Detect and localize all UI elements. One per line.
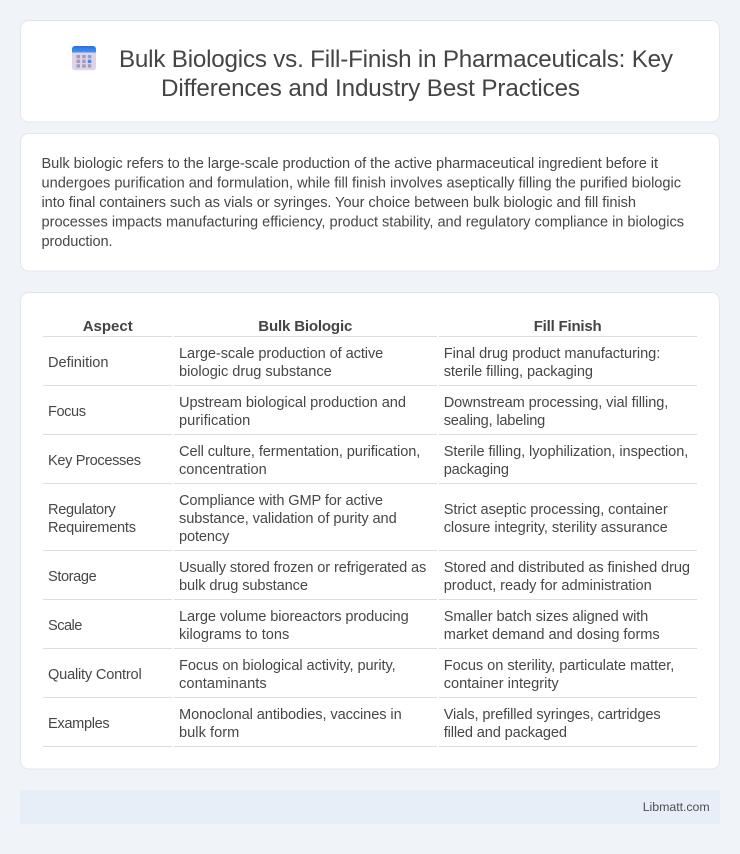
row: Definition: Large-scale production of active bbox=[179, 346, 383, 362]
row: Examples: Monoclonal antibodies, vaccines in bbox=[179, 707, 402, 723]
row: Examples: filled and packaged bbox=[444, 725, 567, 741]
row: Regulatory Requirements: Compliance with GMP for active bbox=[179, 493, 383, 509]
row: Focus: Downstream processing, vial filling, bbox=[444, 395, 668, 411]
row: Quality Control bbox=[43, 658, 697, 698]
row: Key Processes: Cell culture, fermentation, purification, bbox=[179, 444, 420, 460]
row: Examples: bulk form bbox=[179, 725, 239, 741]
row: Scale: Smaller batch sizes aligned with bbox=[444, 609, 648, 625]
row: Scale: kilograms to tons bbox=[179, 627, 289, 643]
row: Regulatory Requirements bbox=[43, 493, 697, 551]
row: Key Processes: Sterile filling, lyophilization, inspection, bbox=[444, 444, 688, 460]
footer bar: Libmatt.com bbox=[643, 800, 710, 814]
title: Differences and Industry Best Practices bbox=[161, 75, 580, 102]
row: Regulatory Requirements: closure integrity, sterility assurance bbox=[444, 520, 668, 536]
row: Definition: biologic drug substance bbox=[179, 364, 332, 380]
row: Key Processes: Key Processes bbox=[48, 453, 141, 469]
text block: summary paragraph: Bulk biologic refers to the large-scale production of the active pharmaceutical ingredient before it bbox=[42, 156, 658, 172]
row: Focus: purification bbox=[179, 413, 250, 429]
table header row: Bulk Biologic bbox=[258, 318, 352, 335]
row: Key Processes: packaging bbox=[444, 462, 509, 478]
row: Scale: Large volume bioreactors producing bbox=[179, 609, 409, 625]
row: Examples: Examples bbox=[48, 716, 110, 732]
row: Examples: Vials, prefilled syringes, cartridges bbox=[444, 707, 661, 723]
row: Storage: product, ready for administration bbox=[444, 578, 652, 594]
row: Regulatory Requirements: Requirements bbox=[48, 520, 136, 536]
panel: title card bbox=[20, 20, 720, 122]
row: Definition: sterile filling, packaging bbox=[444, 364, 593, 380]
row: Quality Control: Quality Control bbox=[48, 667, 142, 683]
panel: summary card bbox=[20, 134, 720, 271]
row: Storage: Stored and distributed as finished drug bbox=[444, 560, 690, 576]
row: Storage: Storage bbox=[48, 569, 97, 585]
row: Definition: Definition bbox=[48, 355, 108, 371]
row: Focus bbox=[43, 395, 697, 435]
text block: summary paragraph: undergoes purification and formulation, while fill finish involves aseptically filling the purified biologic bbox=[42, 176, 681, 192]
table header row bbox=[43, 318, 697, 337]
text block: summary paragraph bbox=[42, 156, 684, 250]
row: Focus: Upstream biological production and bbox=[179, 395, 406, 411]
text block: summary paragraph: into final containers such as vials or syringes. Your choice between bulk biologic and fill finish bbox=[42, 195, 636, 211]
row: Definition: Final drug product manufacturing: bbox=[444, 346, 660, 362]
row: Scale: market demand and dosing forms bbox=[444, 627, 660, 643]
row: Storage: Usually stored frozen or refrigerated as bbox=[179, 560, 426, 576]
row: Quality Control: contaminants bbox=[179, 676, 267, 692]
row: Regulatory Requirements: Strict aseptic processing, container bbox=[444, 502, 668, 518]
row: Quality Control: container integrity bbox=[444, 676, 559, 692]
row: Key Processes: concentration bbox=[179, 462, 267, 478]
row: Regulatory Requirements: potency bbox=[179, 529, 230, 545]
text block: summary paragraph: production. bbox=[42, 234, 112, 250]
row: Quality Control: Focus on sterility, particulate matter, bbox=[444, 658, 674, 674]
icon: calendar bbox=[72, 46, 96, 70]
row: Regulatory Requirements: substance, validation of purity and bbox=[179, 511, 397, 527]
title bbox=[119, 46, 674, 102]
row: Key Processes bbox=[43, 444, 697, 484]
row: Scale bbox=[43, 609, 697, 649]
table header row: Fill Finish bbox=[534, 318, 602, 335]
row: Definition bbox=[43, 346, 697, 386]
row: Focus: Focus bbox=[48, 404, 86, 420]
panel: comparison table card bbox=[20, 292, 720, 769]
table header row: Aspect bbox=[83, 318, 133, 335]
row: Storage bbox=[43, 560, 697, 600]
row: Storage: bulk drug substance bbox=[179, 578, 308, 594]
title: Bulk Biologics vs. Fill-Finish in Pharmaceuticals: Key bbox=[119, 46, 674, 73]
row: Quality Control: Focus on biological activity, purity, bbox=[179, 658, 396, 674]
row: Focus: sealing, labeling bbox=[444, 413, 545, 429]
row: Examples bbox=[43, 707, 697, 747]
row: Scale: Scale bbox=[48, 618, 82, 634]
text block: summary paragraph: processes impacts manufacturing efficiency, product stability, and regulatory compliance in biologics bbox=[42, 214, 684, 230]
row: Regulatory Requirements: Regulatory bbox=[48, 502, 116, 518]
footer bar bbox=[20, 790, 720, 824]
